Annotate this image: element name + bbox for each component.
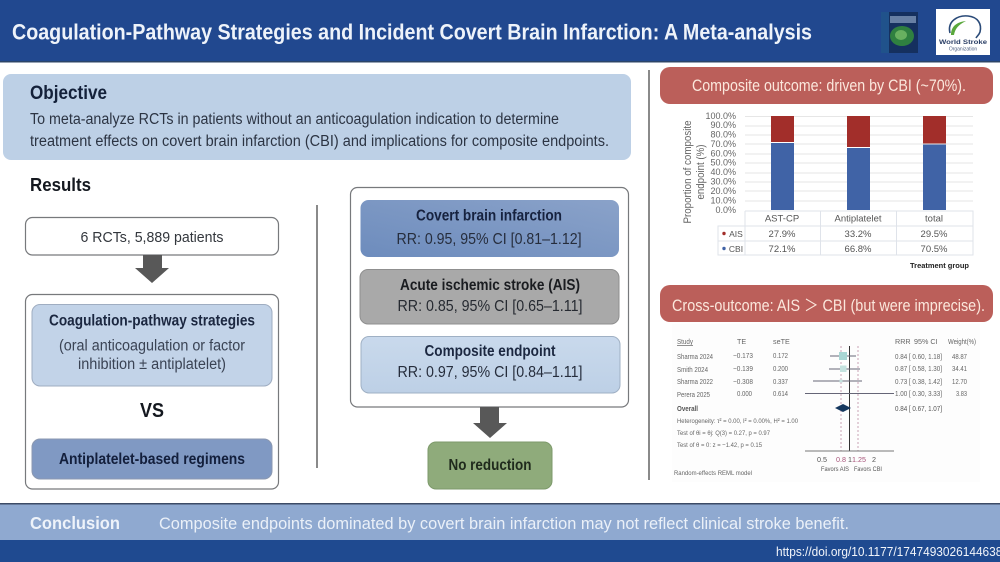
bar: antiplatelet <box>847 116 870 210</box>
data table: Antiplatelet <box>834 214 882 224</box>
study rows: 0.84 [ 0.60, 1.18] <box>895 352 942 361</box>
study rows: Perera 2025 <box>677 390 710 399</box>
text: objective line 2: treatment effects on covert brain infarction (CBI) and implications for composite endpoints. <box>30 133 609 150</box>
heterogeneity statistics <box>677 418 798 449</box>
study rows: 3.83 <box>956 389 967 398</box>
study rows: 12.70 <box>952 377 967 386</box>
y-axis title line 2: endpoint (%) <box>695 144 707 200</box>
column headers: seTE <box>773 337 790 346</box>
study rows: Sharma 2022 <box>677 377 713 386</box>
box: trial count: 6 RCTs, 5,889 patients <box>80 229 224 246</box>
icon: journal cover <box>881 12 918 53</box>
icon: World Stroke Organization logo: World Stroke <box>939 39 988 46</box>
column headers: 95% CI <box>914 337 938 346</box>
data table: 66.8% <box>845 244 872 255</box>
box: antiplatelet-based regimens: Antiplatelet-based regimens <box>59 451 245 468</box>
column headers <box>677 337 976 346</box>
arrow: trials to comparison <box>135 255 169 283</box>
overall row: 0.84 [ 0.67, 1.07] <box>895 404 942 413</box>
data table: 70.5% <box>921 244 948 255</box>
study rows: 0.337 <box>773 377 788 386</box>
data table: AIS <box>729 229 743 239</box>
box: no reduction: No reduction <box>448 457 532 474</box>
heterogeneity statistics: Heterogeneity: τ² = 0.00, I² = 0.00%, H² = 1.00 <box>677 418 798 425</box>
panel: conclusion <box>0 503 1000 540</box>
axis tick labels: 1 <box>848 455 852 464</box>
study rows: 34.41 <box>952 364 967 373</box>
y-axis tick labels: 0.0% <box>715 205 736 215</box>
study rows <box>677 351 967 399</box>
y-axis tick labels: 10.0% <box>710 196 736 206</box>
overall row: Overall <box>677 404 698 413</box>
heterogeneity statistics: Test of θi = θj: Q(3) = 0.27, p = 0.97 <box>677 430 770 437</box>
y-axis tick labels: 30.0% <box>710 176 736 186</box>
icon: World Stroke Organization logo <box>936 9 990 55</box>
study rows: −0.173 <box>733 351 753 360</box>
study rows: 0.000 <box>737 389 752 398</box>
y-axis tick labels: 80.0% <box>710 130 736 140</box>
panel: comparison groups <box>26 294 278 489</box>
text: conclusion: Composite endpoints dominated by covert brain infarction may not reflect clinical stroke benefit. <box>159 515 849 533</box>
data table: 27.9% <box>769 229 796 240</box>
data table: AST-CP <box>765 214 799 224</box>
panel: outcome results <box>350 188 628 407</box>
data table <box>722 214 948 255</box>
overall row <box>677 404 942 413</box>
box: covert brain infarction: Covert brain infarction <box>416 208 562 224</box>
data table: 29.5% <box>921 229 948 240</box>
y-axis tick labels: 40.0% <box>710 167 736 177</box>
axis direction labels: Favors CBI <box>854 466 882 473</box>
axis tick labels: 1.25 <box>852 455 866 464</box>
chart: forest plot <box>672 324 980 482</box>
banner: cross-outcome <box>660 285 993 322</box>
footer band <box>0 540 1000 562</box>
column headers: TE <box>737 337 746 346</box>
heading: conclusion: Conclusion <box>30 513 120 533</box>
model note: Random-effects REML model <box>674 470 752 477</box>
box: acute ischemic stroke: RR: 0.85, 95% CI [0.65–1.11] <box>398 298 582 315</box>
box: covert brain infarction <box>360 200 619 257</box>
data table: total <box>925 214 943 224</box>
y-axis tick labels: 90.0% <box>710 120 736 130</box>
icon: World Stroke Organization logo: Organization <box>949 46 977 52</box>
y-axis tick labels: 100.0% <box>705 111 736 121</box>
box: coagulation-pathway strategies: inhibition ± antiplatelet) <box>78 356 226 373</box>
box: covert brain infarction: RR: 0.95, 95% CI [0.81–1.12] <box>396 231 582 248</box>
column headers: Weight(%) <box>948 337 976 346</box>
title: Coagulation-Pathway Strategies and Incident Covert Brain Infarction: A Meta-analysis <box>12 20 812 44</box>
study rows: 1.00 [ 0.30, 3.33] <box>895 389 942 398</box>
bar: AST-CP <box>771 116 794 210</box>
y-axis tick labels: 20.0% <box>710 186 736 196</box>
y-axis tick labels: 50.0% <box>710 158 736 168</box>
box: composite endpoint: Composite endpoint <box>424 343 556 360</box>
study rows: −0.139 <box>733 364 753 373</box>
box: trial count <box>26 218 278 255</box>
heterogeneity statistics: Test of θ = 0: z = −1.42, p = 0.15 <box>677 442 762 449</box>
box: coagulation-pathway strategies <box>32 304 272 386</box>
forest plot rows <box>805 356 894 394</box>
chart: stacked bar proportion of composite endpoint <box>682 111 973 270</box>
bar: total <box>923 116 946 210</box>
study rows: 0.73 [ 0.38, 1.42] <box>895 377 942 386</box>
header band <box>0 0 1000 62</box>
box: antiplatelet-based regimens <box>32 439 272 479</box>
study rows: Smith 2024 <box>677 365 708 374</box>
study rows: 0.200 <box>773 364 788 373</box>
study rows: 0.614 <box>773 389 788 398</box>
data table: 72.1% <box>769 244 796 255</box>
axis tick labels <box>817 455 876 464</box>
axis direction labels <box>821 466 882 473</box>
study rows: 0.87 [ 0.58, 1.30] <box>895 364 942 373</box>
box: acute ischemic stroke <box>360 270 619 324</box>
study rows: Sharma 2024 <box>677 352 713 361</box>
text: objective line 1: To meta-analyze RCTs in patients without an anticoagulation indication to determine <box>30 111 559 128</box>
panel: objective <box>3 74 631 160</box>
y-axis tick labels <box>705 111 736 215</box>
study rows: 0.172 <box>773 351 788 360</box>
axis direction labels: Favors AIS <box>821 466 850 473</box>
heading: results: Results <box>30 174 91 195</box>
axis tick labels: 2 <box>872 455 876 464</box>
study rows: 48.87 <box>952 352 967 361</box>
label: versus: VS <box>140 399 164 422</box>
box: no reduction <box>428 442 552 489</box>
column headers: RRR <box>895 337 911 346</box>
heading: objective: Objective <box>30 83 107 104</box>
box: coagulation-pathway strategies: (oral anticoagulation or factor <box>59 338 245 354</box>
y-axis title: Proportion of composite <box>682 120 694 224</box>
data table: CBI <box>729 244 743 254</box>
box: composite endpoint <box>361 336 620 393</box>
x-axis title: Treatment group <box>910 261 970 270</box>
banner: composite outcome <box>660 67 993 104</box>
overall diamond <box>835 404 851 412</box>
column headers: Study <box>677 337 693 346</box>
study rows: −0.308 <box>733 377 753 386</box>
box: acute ischemic stroke: Acute ischemic stroke (AIS) <box>400 277 580 294</box>
box: composite endpoint: RR: 0.97, 95% CI [0.84–1.11] <box>398 364 582 381</box>
axis tick labels: 0.5 <box>817 455 827 464</box>
y-axis tick labels: 70.0% <box>710 139 736 149</box>
box: coagulation-pathway strategies: Coagulation-pathway strategies <box>49 312 255 330</box>
y-axis tick labels: 60.0% <box>710 148 736 158</box>
data table: 33.2% <box>845 229 872 240</box>
axis tick labels: 0.8 <box>836 455 846 464</box>
arrow: outcomes to conclusion <box>473 407 507 438</box>
